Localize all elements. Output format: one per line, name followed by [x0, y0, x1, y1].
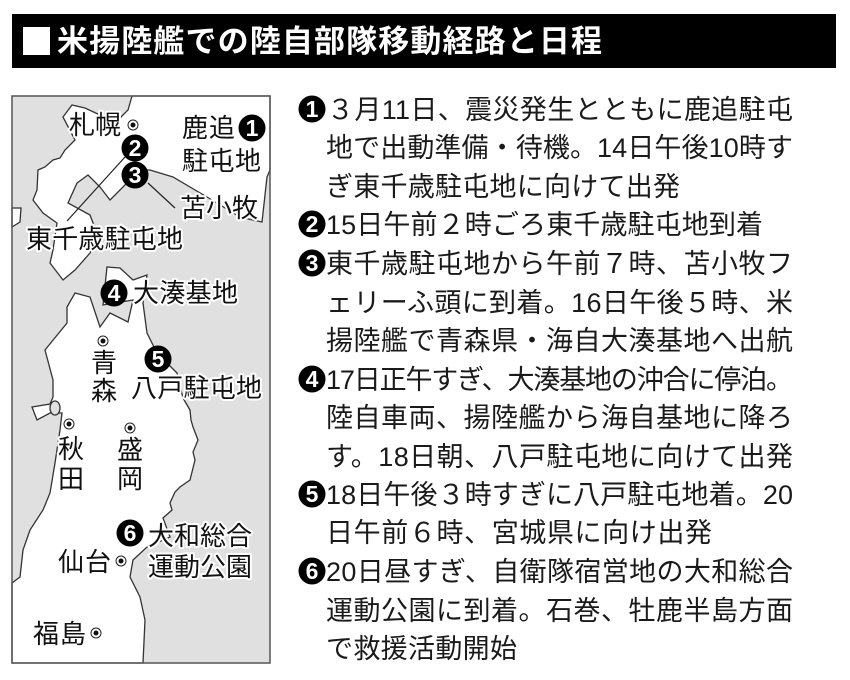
step 4: 4 — [306, 366, 319, 392]
step 3: ェリーふ頭に到着。16日午後５時、米 — [326, 288, 793, 318]
map label: Shikaoi camp: 駐屯地 — [182, 146, 261, 176]
map marker 5: 5 — [152, 346, 165, 372]
step 1: ぎ東千歳駐屯地に向けて出発 — [326, 172, 680, 202]
map label: Ominato base: 大湊基地 — [133, 278, 238, 308]
step 3: 揚陸艦で青森県・海自大湊基地へ出航 — [326, 326, 793, 356]
map label: Higashi-Chitose camp: 東千歳駐屯地 — [26, 224, 183, 254]
map label: Aomori: 青 — [91, 348, 117, 378]
title banner — [12, 14, 836, 68]
map label: Sendai: 仙台 — [58, 547, 111, 577]
map label: Fukushima: 福島 — [33, 619, 86, 649]
step 2: 15日午前２時ごろ東千歳駐屯地到着 — [326, 210, 763, 240]
step 6: 20日昼すぎ、自衛隊宿営地の大和総合 — [326, 557, 793, 587]
map marker 5 — [144, 346, 172, 372]
step 1: 1 — [306, 96, 319, 122]
step 5: 18日午後３時すぎに八戸駐屯地着。20 — [326, 480, 793, 510]
map land: Okushiri island — [12, 208, 21, 227]
step 4: す。18日朝、八戸駐屯地に向けて出発 — [326, 442, 793, 472]
step 1 — [298, 95, 793, 202]
step 6 — [298, 557, 793, 664]
text block: schedule — [298, 95, 793, 664]
step 4 — [298, 365, 793, 472]
step 3: 東千歳駐屯地から午前７時、苫小牧フ — [326, 249, 793, 279]
step 5 — [298, 480, 793, 548]
step 1: 地で出動準備・待機。14日午後10時す — [326, 133, 793, 163]
step 5: 日午前６時、宮城県に向け出発 — [326, 518, 712, 548]
step 3 — [298, 249, 793, 356]
map marker 6 — [116, 520, 144, 546]
map land: Honshu — [12, 267, 198, 663]
step 4: 17日正午すぎ、大湊基地の沖合に停泊。 — [326, 365, 793, 395]
panel: route map: 田 — [58, 464, 84, 494]
city marker: Fukushima — [91, 628, 101, 638]
map marker 1: 1 — [246, 115, 259, 141]
step 6: 6 — [306, 558, 318, 584]
map frame — [12, 96, 270, 663]
city marker: Aomori — [98, 336, 108, 346]
panel: route map: 岡 — [117, 464, 143, 494]
map label: Morioka: 盛 — [117, 435, 143, 465]
map marker 1 — [238, 114, 266, 142]
panel: route map: 森 — [91, 376, 117, 406]
map background: sea — [12, 96, 270, 663]
step 6: 運動公園に到着。石巻、牡鹿半島方面 — [326, 596, 793, 626]
step 3: 3 — [306, 250, 318, 276]
map marker 3: 3 — [129, 162, 141, 188]
step 5: 5 — [306, 481, 319, 507]
map marker 3 — [122, 162, 148, 188]
map lake: Hachirogata — [50, 401, 60, 415]
map label: Hachinohe camp: 八戸駐屯地 — [131, 373, 262, 403]
map marker 4: 4 — [108, 280, 121, 306]
map label: Shikaoi: 鹿追 — [182, 113, 235, 143]
city marker: Sendai — [116, 556, 126, 566]
map marker 2 — [122, 134, 148, 162]
map land: Hokkaido — [33, 96, 270, 280]
panel: route map: 運動公園 — [148, 552, 252, 582]
leader line: Higashi-Chitose — [67, 157, 125, 221]
step 1: ３月11日、震災発生とともに鹿追駐屯 — [327, 95, 793, 125]
city marker: Akita — [64, 419, 74, 429]
map marker 2: 2 — [129, 135, 141, 161]
map label: Yamato park: 大和総合 — [148, 521, 252, 551]
step 6: で救援活動開始 — [326, 634, 517, 664]
step 2: 2 — [306, 211, 318, 237]
city marker: Morioka — [125, 423, 135, 433]
map label: Sapporo: 札幌 — [69, 110, 121, 140]
map marker 6: 6 — [124, 520, 136, 546]
panel: route map — [12, 96, 270, 663]
city marker: Sapporo — [128, 120, 138, 130]
step 4: 陸自車両、揚陸艦から海自基地に降ろ — [326, 403, 793, 433]
leader line: Tomakomai — [148, 183, 175, 208]
map label: Akita: 秋 — [58, 434, 84, 464]
title banner: 米揚陸艦での陸自部隊移動経路と日程 — [57, 24, 602, 59]
map label: Tomakomai: 苫小牧 — [180, 193, 258, 223]
map marker 4 — [100, 280, 128, 306]
